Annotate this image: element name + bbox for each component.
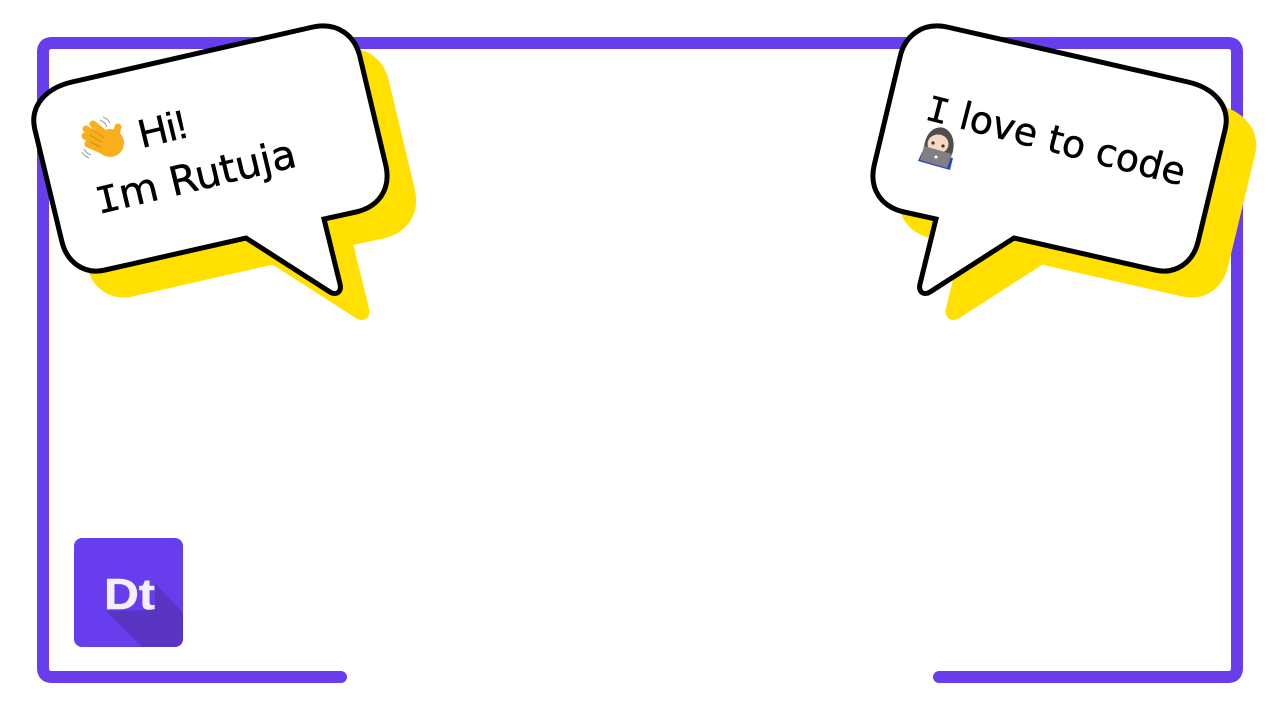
bubble shadow: right <box>901 50 1254 318</box>
logo: Dt <box>74 538 183 647</box>
bubble outline: right <box>873 26 1226 294</box>
bubble shadow: left <box>61 50 414 318</box>
text: I love to code: I love to code <box>921 85 1190 197</box>
bubble outline: left <box>34 26 387 294</box>
speech bubble: left <box>34 26 414 318</box>
logo long shadow <box>106 583 183 647</box>
text: Im Rutuja: Im Rutuja <box>91 131 301 227</box>
text: Hi!: Hi! <box>134 103 192 157</box>
icon: woman at laptop <box>918 127 954 170</box>
logo text: Dt <box>104 570 155 619</box>
icon: waving hand <box>82 117 124 158</box>
speech bubble: right <box>873 26 1254 318</box>
